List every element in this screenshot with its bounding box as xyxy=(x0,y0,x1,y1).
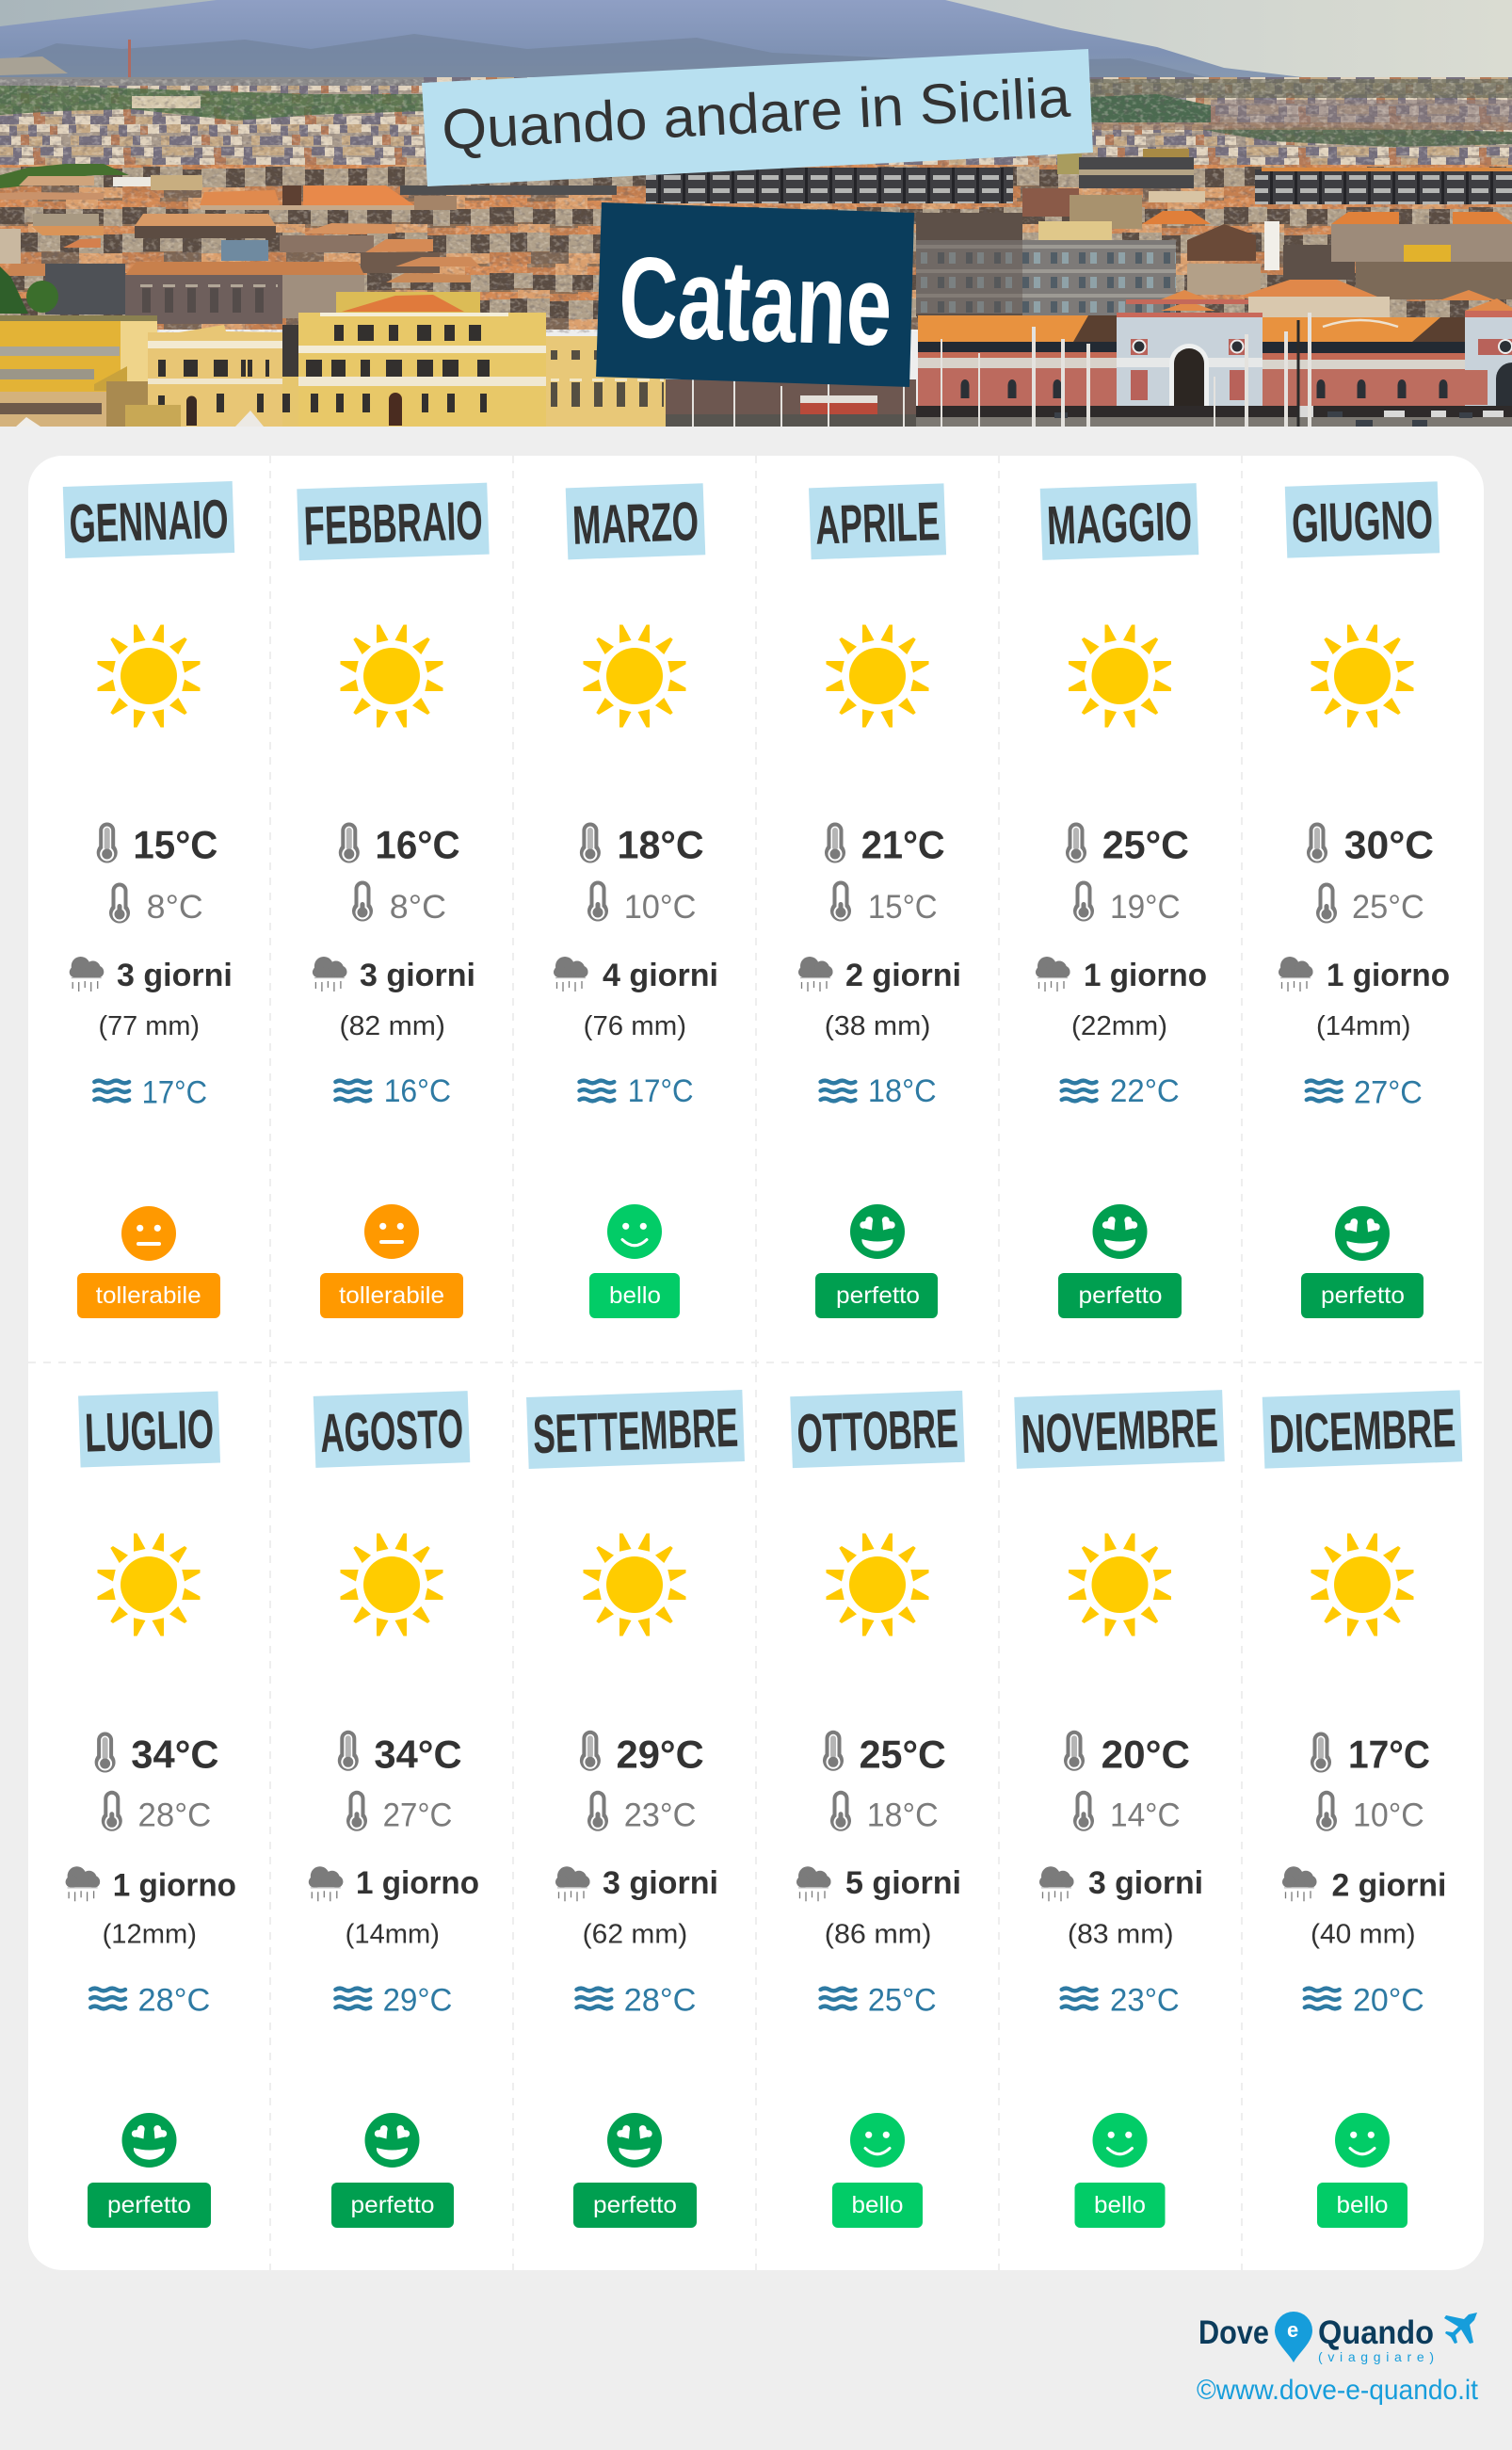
logo: Dove e Quando viaggiare: Quando xyxy=(1318,2314,1434,2351)
icon: min temperature xyxy=(830,1791,851,1831)
icon: rain xyxy=(313,957,346,991)
rating badge: perfetto xyxy=(593,2192,677,2218)
logo: Dove e Quando viaggiare: Dove xyxy=(1198,2314,1269,2351)
max temperature: 18°C xyxy=(618,823,704,867)
title ribbon: Quando andare in Sicilia: Quando andare in Sicilia xyxy=(441,66,1072,161)
rainy days: 5 giorni xyxy=(845,1865,961,1901)
month label xyxy=(1040,483,1198,560)
month label: SETTEMBRE xyxy=(532,1397,739,1465)
icon: sea xyxy=(335,1081,370,1101)
main white card xyxy=(28,456,1484,2270)
max temperature: 34°C xyxy=(374,1733,462,1777)
sea temperature: 16°C xyxy=(384,1073,451,1109)
rating badge: perfetto xyxy=(107,2192,191,2218)
icon: sea xyxy=(1305,1989,1340,2008)
icon: max temperature xyxy=(97,823,118,862)
rating badge: bello xyxy=(609,1282,661,1309)
rainy days: 4 giorni xyxy=(603,958,718,993)
rating badge: bello xyxy=(851,2192,904,2218)
rating badge xyxy=(88,2183,211,2228)
rainy days: 1 giorno xyxy=(356,1865,479,1901)
icon: max temperature xyxy=(1064,1731,1085,1771)
icon: smiling face xyxy=(1335,2113,1390,2168)
logo: Dove e Quando viaggiare xyxy=(1198,2312,1477,2364)
icon: max temperature xyxy=(580,1731,601,1771)
sea temperature: 18°C xyxy=(868,1073,937,1109)
icon: sun xyxy=(98,1533,200,1636)
rating badge: bello xyxy=(1337,2192,1388,2218)
icon: rain xyxy=(1036,957,1070,991)
panel: dicembre xyxy=(1263,1390,1462,2228)
rainfall: (83 mm) xyxy=(1068,1919,1174,1949)
icon: sea xyxy=(821,1989,855,2008)
icon: neutral face xyxy=(121,1206,176,1261)
rainfall: (38 mm) xyxy=(825,1011,930,1041)
rainy days: 1 giorno xyxy=(113,1867,236,1903)
max temperature: 29°C xyxy=(616,1733,704,1777)
icon: max temperature xyxy=(95,1733,116,1772)
min temperature: 23°C xyxy=(624,1797,697,1833)
rainy days: 3 giorni xyxy=(603,1865,718,1901)
rating badge: tollerabile xyxy=(96,1282,201,1309)
panel: maggio xyxy=(1036,483,1207,1318)
min temperature: 14°C xyxy=(1110,1797,1181,1833)
max temperature: 15°C xyxy=(133,823,217,867)
icon: max temperature xyxy=(338,1731,359,1771)
icon: sun xyxy=(584,1533,685,1636)
sea temperature: 17°C xyxy=(142,1075,207,1111)
rating badge xyxy=(589,1273,680,1318)
icon: min temperature xyxy=(102,1791,122,1831)
logo: Dove e Quando viaggiare: e xyxy=(1287,2318,1298,2342)
max temperature: 30°C xyxy=(1344,823,1434,867)
panel: ottobre xyxy=(790,1391,965,2228)
month label: MARZO xyxy=(571,491,700,556)
icon: max temperature xyxy=(823,1731,844,1771)
sea temperature: 20°C xyxy=(1353,1983,1424,2019)
rainy days: 1 giorno xyxy=(1327,958,1450,993)
rainy days: 3 giorni xyxy=(117,958,233,993)
icon: max temperature xyxy=(1066,823,1086,862)
icon: max temperature xyxy=(339,823,360,862)
icon: max temperature xyxy=(1307,823,1327,862)
rating badge: perfetto xyxy=(836,1282,920,1309)
icon: sea xyxy=(1062,1989,1096,2008)
website credit: ©www.dove-e-quando.it xyxy=(1197,2375,1479,2406)
icon: min temperature xyxy=(1316,1791,1337,1831)
icon: sun xyxy=(827,625,928,727)
month label: FEBBRAIO xyxy=(303,490,484,557)
rainfall: (14mm) xyxy=(1316,1011,1410,1041)
icon: neutral face xyxy=(364,1204,419,1259)
month label: APRILE xyxy=(814,491,941,556)
month label xyxy=(790,1391,965,1468)
icon: sea xyxy=(335,1989,370,2008)
rating badge xyxy=(320,1273,463,1318)
rainfall: (76 mm) xyxy=(584,1011,686,1041)
sea temperature: 25°C xyxy=(868,1983,937,2019)
rainfall: (22mm) xyxy=(1071,1011,1167,1041)
month label xyxy=(297,483,490,560)
panel: febbraio xyxy=(297,483,490,1318)
month label: GENNAIO xyxy=(69,489,230,555)
panel: agosto xyxy=(309,1391,479,2228)
rating badge xyxy=(573,2183,697,2228)
icon: min temperature xyxy=(1073,1791,1094,1831)
panel: luglio xyxy=(66,1392,236,2228)
rating badge xyxy=(1301,1273,1424,1318)
header photo: Catania city with Etna xyxy=(0,0,1512,427)
icon: sea xyxy=(580,1081,614,1101)
title box: Catane xyxy=(596,202,914,387)
min temperature: 18°C xyxy=(867,1797,939,1833)
rainy days: 2 giorni xyxy=(845,958,961,993)
month label xyxy=(63,481,234,558)
icon: sun xyxy=(98,625,200,727)
min temperature: 19°C xyxy=(1110,889,1181,926)
icon: sun xyxy=(827,1533,928,1636)
panel: giugno xyxy=(1279,481,1450,1318)
icon: rain xyxy=(554,957,587,991)
icon: heart-eyes face xyxy=(1092,1204,1147,1259)
min temperature: 28°C xyxy=(137,1797,211,1833)
month label xyxy=(314,1391,470,1468)
icon: rain xyxy=(555,1866,589,1901)
max temperature: 20°C xyxy=(1102,1733,1190,1777)
month label xyxy=(1285,481,1440,558)
icon: map pin xyxy=(1275,2312,1312,2362)
icon: min temperature xyxy=(587,881,608,921)
rating badge xyxy=(77,1273,220,1318)
harbour station xyxy=(666,379,916,427)
month label: OTTOBRE xyxy=(796,1398,959,1464)
min temperature: 8°C xyxy=(390,889,446,926)
icon: sun xyxy=(1311,1533,1414,1636)
rainfall: (86 mm) xyxy=(825,1919,931,1949)
right side buildings xyxy=(916,213,1022,316)
icon: sea xyxy=(1062,1081,1096,1101)
sea temperature: 28°C xyxy=(137,1983,210,2019)
min temperature: 27°C xyxy=(383,1797,452,1833)
icon: rain xyxy=(70,957,104,991)
title ribbon: Quando andare in Sicilia xyxy=(422,49,1093,186)
icon: rain xyxy=(66,1866,100,1901)
month label: GIUGNO xyxy=(1291,489,1434,555)
sea temperature: 23°C xyxy=(1110,1983,1180,2019)
min temperature: 15°C xyxy=(868,889,938,926)
icon: min temperature xyxy=(587,1791,608,1831)
rating badge: perfetto xyxy=(1079,1282,1162,1309)
icon: sun xyxy=(584,625,685,727)
icon: heart-eyes face xyxy=(1335,1206,1390,1261)
rainfall: (62 mm) xyxy=(583,1919,687,1949)
rainfall: (12mm) xyxy=(103,1919,197,1949)
icon: heart-eyes face xyxy=(365,2113,420,2168)
icon: heart-eyes face xyxy=(607,2113,662,2168)
icon: smiling face xyxy=(1092,2113,1147,2168)
icon: sun xyxy=(1069,625,1171,727)
month label: MAGGIO xyxy=(1046,491,1193,556)
icon: rain xyxy=(309,1866,343,1901)
yellow palaces xyxy=(0,315,157,321)
month label xyxy=(809,483,946,559)
title box: Catane: Catane xyxy=(617,233,894,370)
month label: LUGLIO xyxy=(84,1398,215,1464)
sea temperature: 28°C xyxy=(624,1983,697,2019)
icon: rain xyxy=(796,1866,830,1901)
icon: min temperature xyxy=(830,881,851,921)
rating badge xyxy=(1075,2183,1166,2228)
icon: rain xyxy=(1039,1866,1073,1901)
rainy days: 2 giorni xyxy=(1331,1867,1446,1903)
month label xyxy=(526,1390,745,1469)
icon: rain xyxy=(1282,1866,1316,1901)
rainy days: 1 giorno xyxy=(1084,958,1207,993)
rating badge xyxy=(331,2183,454,2228)
icon: min temperature xyxy=(109,883,130,923)
max temperature: 34°C xyxy=(131,1733,218,1777)
min temperature: 8°C xyxy=(147,889,203,926)
max temperature: 16°C xyxy=(375,823,460,867)
rainfall: (77 mm) xyxy=(98,1011,200,1041)
sea temperature: 29°C xyxy=(383,1983,452,2019)
max temperature: 21°C xyxy=(861,823,945,867)
icon: min temperature xyxy=(1316,883,1337,923)
icon: sea xyxy=(94,1081,129,1101)
month label xyxy=(78,1392,220,1467)
panel: settembre xyxy=(526,1390,745,2228)
icon: rain xyxy=(1279,957,1312,991)
month label: NOVEMBRE xyxy=(1020,1397,1219,1465)
month label xyxy=(566,483,705,559)
month label xyxy=(1014,1390,1225,1469)
icon: min temperature xyxy=(1073,881,1094,921)
min temperature: 10°C xyxy=(1353,1797,1424,1833)
icon: smiling face xyxy=(607,1204,662,1259)
icon: sun xyxy=(341,1533,442,1636)
icon: sun xyxy=(1311,625,1414,727)
rainfall: (14mm) xyxy=(346,1919,440,1949)
month label: AGOSTO xyxy=(319,1398,464,1464)
rating badge xyxy=(1058,1273,1182,1318)
icon: heart-eyes face xyxy=(850,1204,905,1259)
rainfall: (82 mm) xyxy=(339,1011,445,1041)
icon: sea xyxy=(576,1989,611,2008)
icon: airplane xyxy=(1444,2313,1477,2344)
sea temperature: 22°C xyxy=(1110,1073,1180,1109)
icon: sun xyxy=(341,625,442,727)
sea temperature: 17°C xyxy=(628,1073,693,1109)
rating badge xyxy=(832,2183,923,2228)
icon: smiling face xyxy=(850,2113,905,2168)
min temperature: 10°C xyxy=(624,889,697,926)
sea temperature: 27°C xyxy=(1354,1075,1423,1111)
icon: sun xyxy=(1069,1533,1171,1636)
rating badge xyxy=(1317,2183,1407,2228)
icon: max temperature xyxy=(1311,1733,1331,1772)
rating badge: perfetto xyxy=(1321,1282,1405,1309)
icon: sea xyxy=(821,1081,855,1101)
max temperature: 25°C xyxy=(1102,823,1189,867)
icon: max temperature xyxy=(825,823,845,862)
rainy days: 3 giorni xyxy=(360,958,475,993)
icon: sea xyxy=(1307,1081,1342,1101)
logo: Dove e Quando viaggiare: (viaggiare) xyxy=(1318,2349,1434,2364)
icon: min temperature xyxy=(346,1791,367,1831)
panel: novembre xyxy=(1014,1390,1225,2228)
panel: gennaio xyxy=(63,481,234,1318)
max temperature: 25°C xyxy=(860,1733,946,1777)
icon: max temperature xyxy=(580,823,601,862)
rating badge xyxy=(815,1273,938,1318)
rating badge: perfetto xyxy=(350,2192,435,2218)
icon: rain xyxy=(798,957,832,991)
icon: sea xyxy=(90,1989,125,2008)
rainfall: (40 mm) xyxy=(1311,1919,1416,1949)
max temperature: 17°C xyxy=(1348,1733,1430,1777)
rating badge: tollerabile xyxy=(339,1282,444,1309)
rainy days: 3 giorni xyxy=(1088,1865,1203,1901)
panel: marzo xyxy=(554,483,718,1318)
min temperature: 25°C xyxy=(1352,889,1424,926)
rating badge: bello xyxy=(1094,2192,1146,2218)
icon: min temperature xyxy=(352,881,373,921)
icon: heart-eyes face xyxy=(122,2113,177,2168)
panel: aprile xyxy=(798,483,961,1318)
